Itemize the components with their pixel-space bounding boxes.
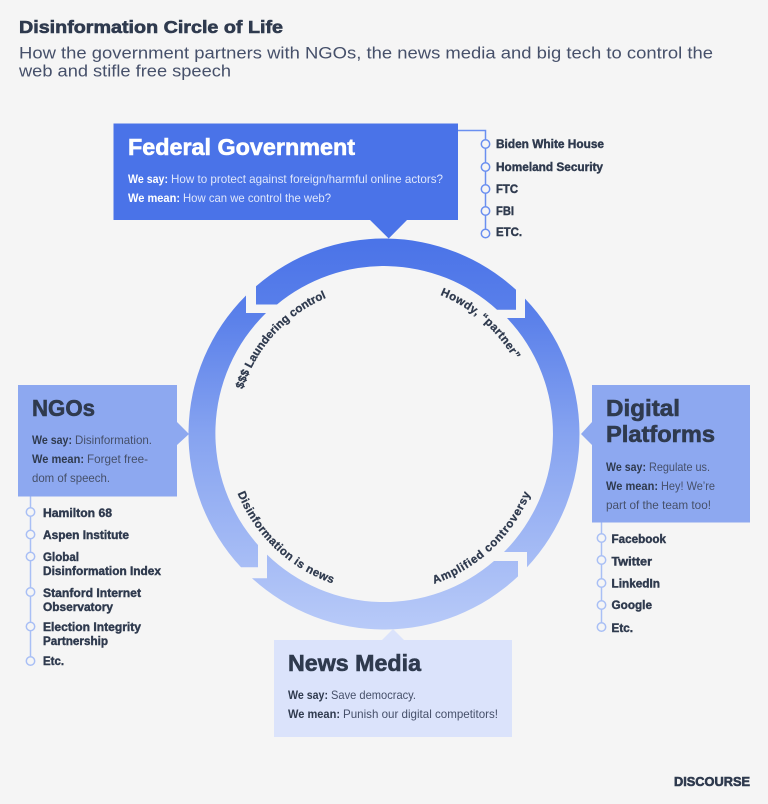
list: ngo organizations: Aspen Institute — [43, 530, 129, 542]
list: ngo organizations: Election Integrity — [43, 622, 142, 634]
callout box: federal government — [114, 124, 458, 238]
heading: digital platforms: Digital — [606, 395, 680, 421]
text: we say: We say: — [606, 460, 646, 474]
text: we say: How to protect against foreign/harmful online actors? — [171, 172, 443, 186]
list: ngo organizations: Disinformation Index — [43, 566, 162, 578]
text: we mean: We mean: — [128, 191, 180, 205]
list: federal agencies: FBI — [496, 206, 514, 218]
panel: digital platforms — [581, 385, 750, 522]
subtitle — [18, 44, 713, 80]
callout box: news media — [274, 629, 512, 737]
list: ngo organizations — [26, 496, 162, 668]
list: federal agencies — [458, 130, 604, 239]
curved label: disinformation is news: Disinformation is news — [238, 490, 334, 583]
text: we say: We say: — [32, 433, 72, 447]
curved label: laundering control: $$$ Laundering control — [236, 290, 326, 389]
heading: digital platforms: Platforms — [606, 421, 715, 447]
text: we mean: part of the team too! — [606, 498, 711, 512]
list: digital platform companies: Google — [612, 600, 652, 612]
text: we say: We say: — [288, 688, 328, 702]
list: ngo organizations: Partnership — [43, 636, 108, 648]
text: we mean — [606, 479, 715, 512]
text: we mean: Forget free- — [87, 452, 148, 466]
text: we say — [606, 460, 710, 474]
heading: digital platforms — [606, 395, 715, 447]
list: federal agencies: Homeland Security — [496, 162, 604, 174]
arrow: bottom arc — [252, 555, 518, 630]
callout box: digital platforms — [581, 385, 750, 522]
heading: federal government: Federal Government — [128, 134, 355, 160]
subtitle: How the government partners with NGOs, the news media and big tech to control the — [19, 44, 713, 62]
text: we mean: We mean: — [288, 707, 340, 721]
list: federal agencies: ETC. — [496, 227, 522, 239]
heading: ngos: NGOs — [32, 395, 95, 421]
subtitle: web and stifle free speech — [18, 62, 231, 80]
text: we mean — [32, 452, 148, 485]
text: we mean: Punish our digital competitors! — [343, 707, 498, 721]
text: we mean: How can we control the web? — [183, 191, 331, 205]
curved label: howdy partner: Howdy, “partner” — [440, 288, 521, 356]
list: ngo organizations: Stanford Internet — [43, 588, 141, 600]
list: digital platform companies: Twitter — [612, 556, 653, 568]
text: we say: Regulate us. — [649, 460, 710, 474]
curved label: amplified controversy: Amplified controversy — [434, 491, 531, 584]
title: Disinformation Circle of Life — [19, 17, 283, 37]
list: ngo organizations: Observatory — [43, 602, 114, 614]
panel: federal government — [114, 124, 458, 238]
list: digital platform companies — [597, 522, 667, 635]
panel: ngos — [18, 385, 189, 496]
text: we mean: dom of speech. — [32, 471, 110, 485]
callout box: ngos — [18, 385, 189, 496]
list: digital platform companies: LinkedIn — [612, 578, 660, 590]
list: federal agencies: Biden White House — [496, 139, 604, 151]
arrow: left arc — [188, 296, 266, 567]
list: digital platform companies: Facebook — [612, 534, 667, 546]
list: digital platform companies: Etc. — [612, 623, 633, 635]
list: ngo organizations: Etc. — [43, 656, 64, 668]
circular arrow cycle — [188, 238, 579, 630]
list: federal agencies: FTC — [496, 184, 518, 196]
text: we say: We say: — [128, 172, 168, 186]
list: ngo organizations: Global — [43, 552, 79, 564]
text: we mean: We mean: — [32, 452, 84, 466]
text: we say: Disinformation. — [75, 433, 152, 447]
heading: news media: News Media — [288, 650, 421, 676]
arrow: top arc — [256, 238, 516, 310]
list: ngo organizations: Hamilton 68 — [43, 508, 113, 520]
text: we mean: We mean: — [606, 479, 658, 493]
logo: discourse: DISCOURSE — [674, 774, 750, 789]
text: we say — [32, 433, 152, 447]
panel: news media — [274, 629, 512, 737]
text: we mean: Hey! We’re — [661, 479, 715, 493]
arrow: right arc — [504, 299, 579, 567]
text: we say: Save democracy. — [331, 688, 416, 702]
text: we say — [288, 688, 416, 702]
